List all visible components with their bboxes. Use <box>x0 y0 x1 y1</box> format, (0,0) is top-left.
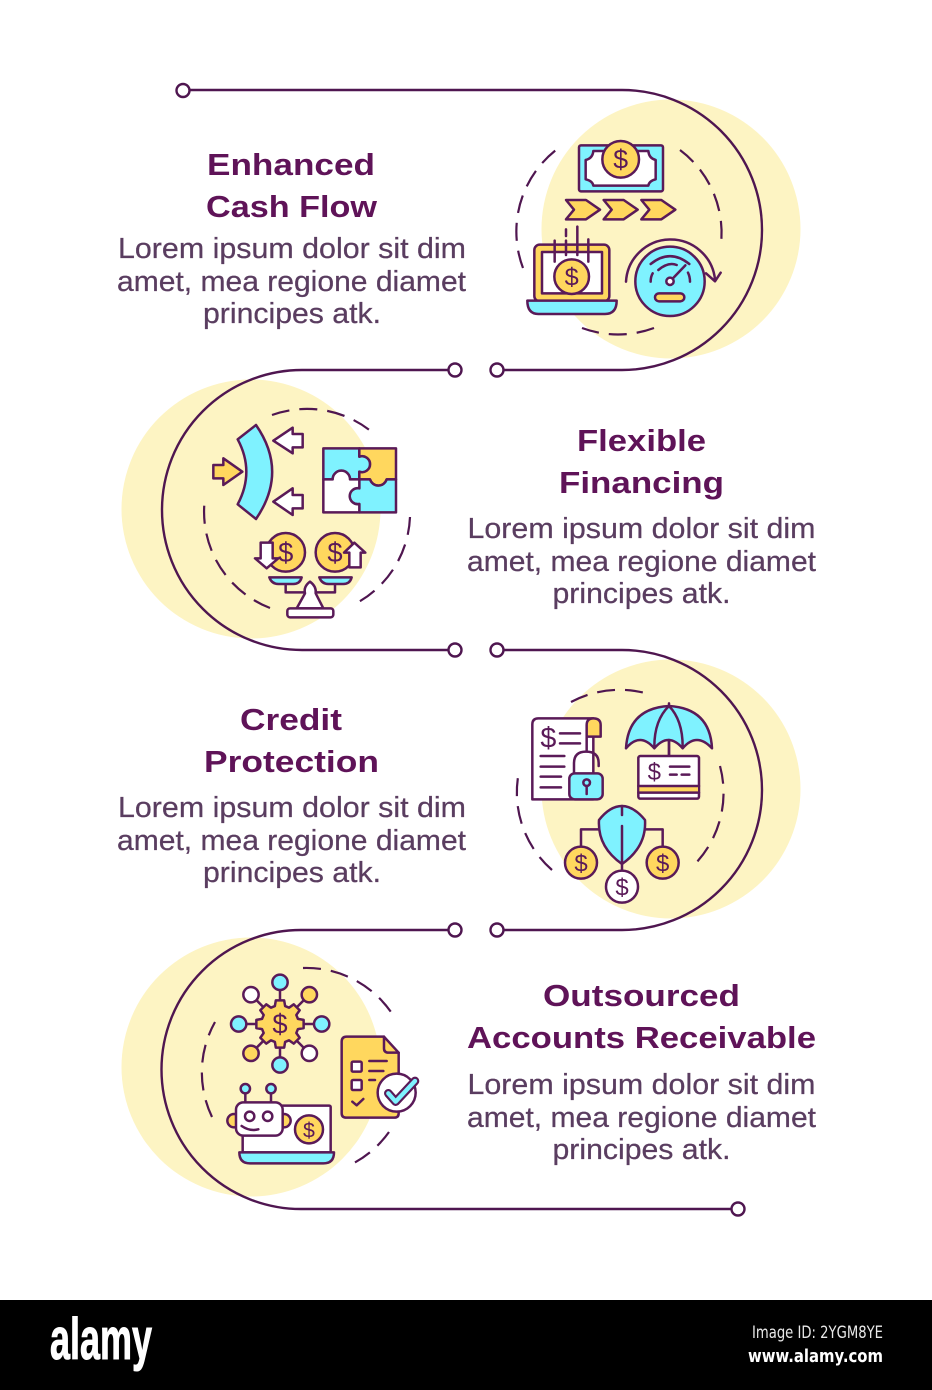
heading: Accounts Receivable <box>467 1020 816 1055</box>
heading: Credit <box>240 702 342 737</box>
icon: outsourced accounts receivable: $ <box>303 1118 315 1142</box>
heading: Financing <box>559 465 724 500</box>
icon: credit protection <box>532 703 712 903</box>
icon: cash flow <box>527 141 721 316</box>
heading <box>467 978 816 1055</box>
icon: credit protection: $ <box>615 874 629 901</box>
text block: Lorem ipsum dolor sit dim <box>118 233 466 265</box>
heading: Outsourced <box>543 978 740 1013</box>
heading: Cash Flow <box>206 189 378 224</box>
text block <box>467 1069 816 1166</box>
footer bar <box>0 1300 932 1390</box>
heading <box>204 702 379 779</box>
footer logo: alamy <box>50 1307 152 1372</box>
text block: principes atk. <box>203 857 381 889</box>
connector line 4 <box>161 930 731 1209</box>
heading: Enhanced <box>207 147 375 182</box>
text block: principes atk. <box>203 298 381 330</box>
text block: Lorem ipsum dolor sit dim <box>118 792 466 824</box>
connector line 2 <box>162 370 448 650</box>
panel: credit protection <box>117 644 800 936</box>
heading <box>559 423 724 500</box>
website: www.alamy.com <box>748 1346 883 1367</box>
text block: amet, mea regione diamet <box>117 825 466 857</box>
dashed ring 3 <box>517 690 724 870</box>
icon: credit protection: $ <box>648 759 661 786</box>
icon: flexible financing <box>213 425 396 617</box>
text block: amet, mea regione diamet <box>467 1102 816 1134</box>
panel: enhanced cash flow <box>117 84 800 376</box>
dashed ring 2 <box>204 409 410 608</box>
heading: Protection <box>204 744 379 779</box>
connector line 1 <box>190 90 762 370</box>
icon: credit protection: $ <box>656 850 669 877</box>
text block: amet, mea regione diamet <box>117 266 466 298</box>
text block <box>467 513 816 610</box>
panel: outsourced accounts receivable <box>122 924 816 1216</box>
icon: credit protection: $ <box>574 850 588 877</box>
icon: credit protection: $ <box>540 722 556 754</box>
icon: outsourced accounts receivable: $ <box>272 1008 288 1039</box>
text block: Lorem ipsum dolor sit dim <box>468 1069 816 1101</box>
icon: cash flow: $ <box>565 264 579 292</box>
text block: amet, mea regione diamet <box>467 546 816 578</box>
heading: Flexible <box>577 423 706 458</box>
icon: flexible financing: $ <box>278 537 293 568</box>
text block: Lorem ipsum dolor sit dim <box>468 513 816 545</box>
panel: flexible financing <box>122 364 816 656</box>
dashed ring 1 <box>516 145 722 334</box>
icon: cash flow: $ <box>613 145 628 175</box>
text block: principes atk. <box>552 1134 730 1166</box>
dashed ring 4 <box>202 968 396 1166</box>
text block: principes atk. <box>552 578 730 610</box>
text block <box>117 233 466 330</box>
connector line 3 <box>504 650 762 930</box>
image id: Image ID: 2YGM8YE <box>752 1323 883 1343</box>
icon: flexible financing: $ <box>327 537 343 568</box>
text block <box>117 792 466 889</box>
heading <box>206 147 378 224</box>
icon: outsourced accounts receivable <box>227 975 416 1163</box>
